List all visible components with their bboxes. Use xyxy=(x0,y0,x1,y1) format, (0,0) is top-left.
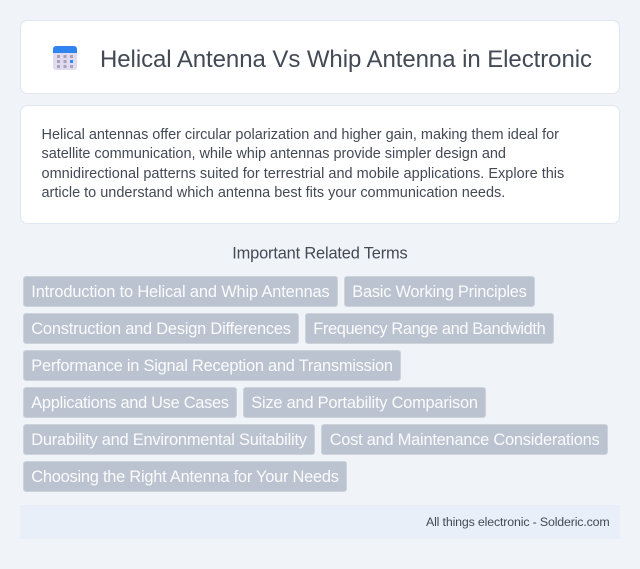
tag: cost: Cost and Maintenance Considerations xyxy=(330,431,600,449)
title: Helical Antenna Vs Whip Antenna in Electronic xyxy=(100,46,592,73)
tag: durability: Durability and Environmental Suitability xyxy=(31,431,308,449)
footer xyxy=(20,505,620,539)
panel: introduction paragraph: satellite communication, while whip antennas provide simpler design and xyxy=(42,146,506,162)
tag: frequency xyxy=(306,314,554,344)
tag: construction: Construction and Design Differences xyxy=(31,320,291,338)
footer: All things electronic - Solderic.com xyxy=(426,515,610,529)
tag: choosing: Choosing the Right Antenna for Your Needs xyxy=(31,468,339,486)
tag: applications: Applications and Use Cases xyxy=(31,394,229,412)
tag: introduction: Introduction to Helical and Whip Antennas xyxy=(31,283,330,301)
tag: cost xyxy=(322,424,608,454)
panel: introduction paragraph xyxy=(20,106,620,224)
icon: calendar xyxy=(53,46,77,70)
tag: applications xyxy=(24,388,236,418)
tag: durability xyxy=(24,424,314,454)
panel: header card xyxy=(20,20,620,94)
tag: working principles: Basic Working Principles xyxy=(352,283,527,301)
panel: introduction paragraph: article to understand which antenna best fits your communication needs. xyxy=(42,185,505,201)
tag: construction xyxy=(24,314,298,344)
tag: frequency: Frequency Range and Bandwidth xyxy=(313,320,546,338)
tag list xyxy=(24,276,608,492)
tag: performance xyxy=(24,350,400,380)
heading: important related terms: Important Related Terms xyxy=(232,244,408,262)
tag: working principles xyxy=(344,276,534,306)
panel: introduction paragraph: omnidirectional patterns suited for terrestrial and mobile applications. Explore this xyxy=(42,166,564,182)
tag: size xyxy=(244,388,486,418)
panel: introduction paragraph: Helical antennas offer circular polarization and higher gain, making them ideal for xyxy=(42,127,559,143)
tag: performance: Performance in Signal Reception and Transmission xyxy=(31,357,393,375)
tag: choosing xyxy=(24,462,346,492)
tag: size: Size and Portability Comparison xyxy=(251,394,478,412)
tag: introduction xyxy=(24,276,338,306)
